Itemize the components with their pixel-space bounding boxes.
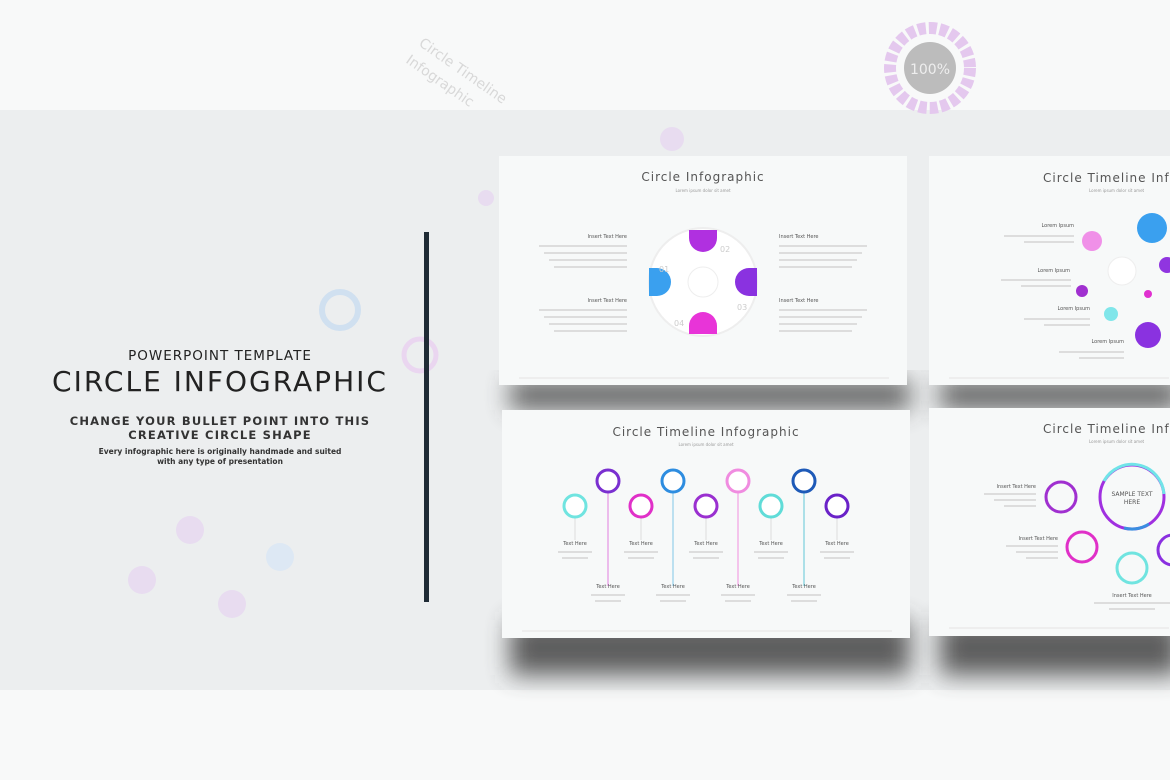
slide: Circle Timeline Infographic (timeline): Text Here (725, 584, 750, 590)
slide: Circle Timeline Infographic (bubbles): Lorem Ipsum (1057, 306, 1090, 312)
slide: Circle Timeline Infographic (bubbles): Lorem Ipsum (1091, 339, 1124, 345)
description: Every infographic here is originally handmade and suited (99, 447, 341, 456)
left text block (52, 348, 388, 466)
slide: Circle Timeline Infographic (rings): Lorem ipsum dolor sit amet (1089, 439, 1145, 444)
slide: Circle Timeline Infographic (timeline): Text Here (693, 541, 718, 547)
slide: Circle Timeline Infographic (bubbles) (929, 156, 1170, 385)
background decoration: Infographic (403, 52, 477, 111)
slide: Circle Infographic (499, 156, 907, 385)
slide: Circle Timeline Infographic (rings): Insert Text Here (1018, 536, 1058, 542)
slide: Circle Infographic: 03 (737, 303, 747, 312)
slide: Circle Timeline Infographic (bubbles): Lorem ipsum dolor sit amet (1089, 188, 1145, 193)
slide: Circle Infographic: 01 (659, 265, 669, 274)
vertical divider bar (424, 232, 429, 602)
slide: Circle Timeline Infographic (timeline): Text Here (595, 584, 620, 590)
description (99, 447, 341, 466)
tagline: CREATIVE CIRCLE SHAPE (128, 428, 312, 442)
slide: Circle Timeline Infographic (rings): Insert Text Here (996, 484, 1036, 490)
slide: Circle Infographic: Circle Infographic (641, 170, 765, 184)
slide: Circle Timeline Infographic (timeline) (502, 410, 910, 638)
slide: Circle Timeline Infographic (rings): SAMPLE TEXT (1112, 491, 1153, 498)
slide: Circle Timeline Infographic (rings): Insert Text Here (1112, 593, 1152, 599)
slide: Circle Timeline Infographic (bubbles): Lorem Ipsum (1037, 268, 1070, 274)
slide: Circle Infographic: Lorem ipsum dolor sit amet (675, 188, 731, 193)
slide: Circle Timeline Infographic (timeline): Lorem ipsum dolor sit amet (678, 442, 734, 447)
slide shadows (492, 370, 1170, 693)
slide: Circle Timeline Infographic (rings) (929, 408, 1170, 636)
slide: Circle Timeline Infographic (bubbles): Lorem Ipsum (1041, 223, 1074, 229)
slide: Circle Infographic: Insert Text Here (588, 234, 627, 240)
slide: Circle Infographic: 02 (720, 245, 730, 254)
main title: CIRCLE INFOGRAPHIC (52, 365, 388, 398)
slide: Circle Infographic: Insert Text Here (779, 234, 818, 240)
slide: Circle Infographic: Insert Text Here (588, 298, 627, 304)
tagline: CHANGE YOUR BULLET POINT INTO THIS (70, 414, 370, 428)
background decoration: Circle Timeline (416, 35, 509, 108)
slide: Circle Timeline Infographic (timeline): Text Here (628, 541, 653, 547)
slide: Circle Timeline Infographic (timeline): Text Here (562, 541, 587, 547)
slide: Circle Timeline Infographic (timeline): Text Here (824, 541, 849, 547)
slide: Circle Timeline Infographic (timeline): Text Here (660, 584, 685, 590)
slide: Circle Timeline Infographic (rings): HERE (1124, 499, 1140, 506)
slide: Circle Infographic: Insert Text Here (779, 298, 818, 304)
slide: Circle Timeline Infographic (timeline): Circle Timeline Infographic (612, 425, 800, 439)
slide: Circle Timeline Infographic (timeline): Text Here (758, 541, 783, 547)
tagline (70, 414, 370, 442)
background decoration: 100% (910, 62, 950, 78)
subtitle: POWERPOINT TEMPLATE (128, 348, 312, 364)
slide: Circle Timeline Infographic (timeline): Text Here (791, 584, 816, 590)
description: with any type of presentation (157, 457, 283, 466)
slide: Circle Infographic: 04 (674, 319, 684, 328)
background middle band (0, 110, 1170, 690)
